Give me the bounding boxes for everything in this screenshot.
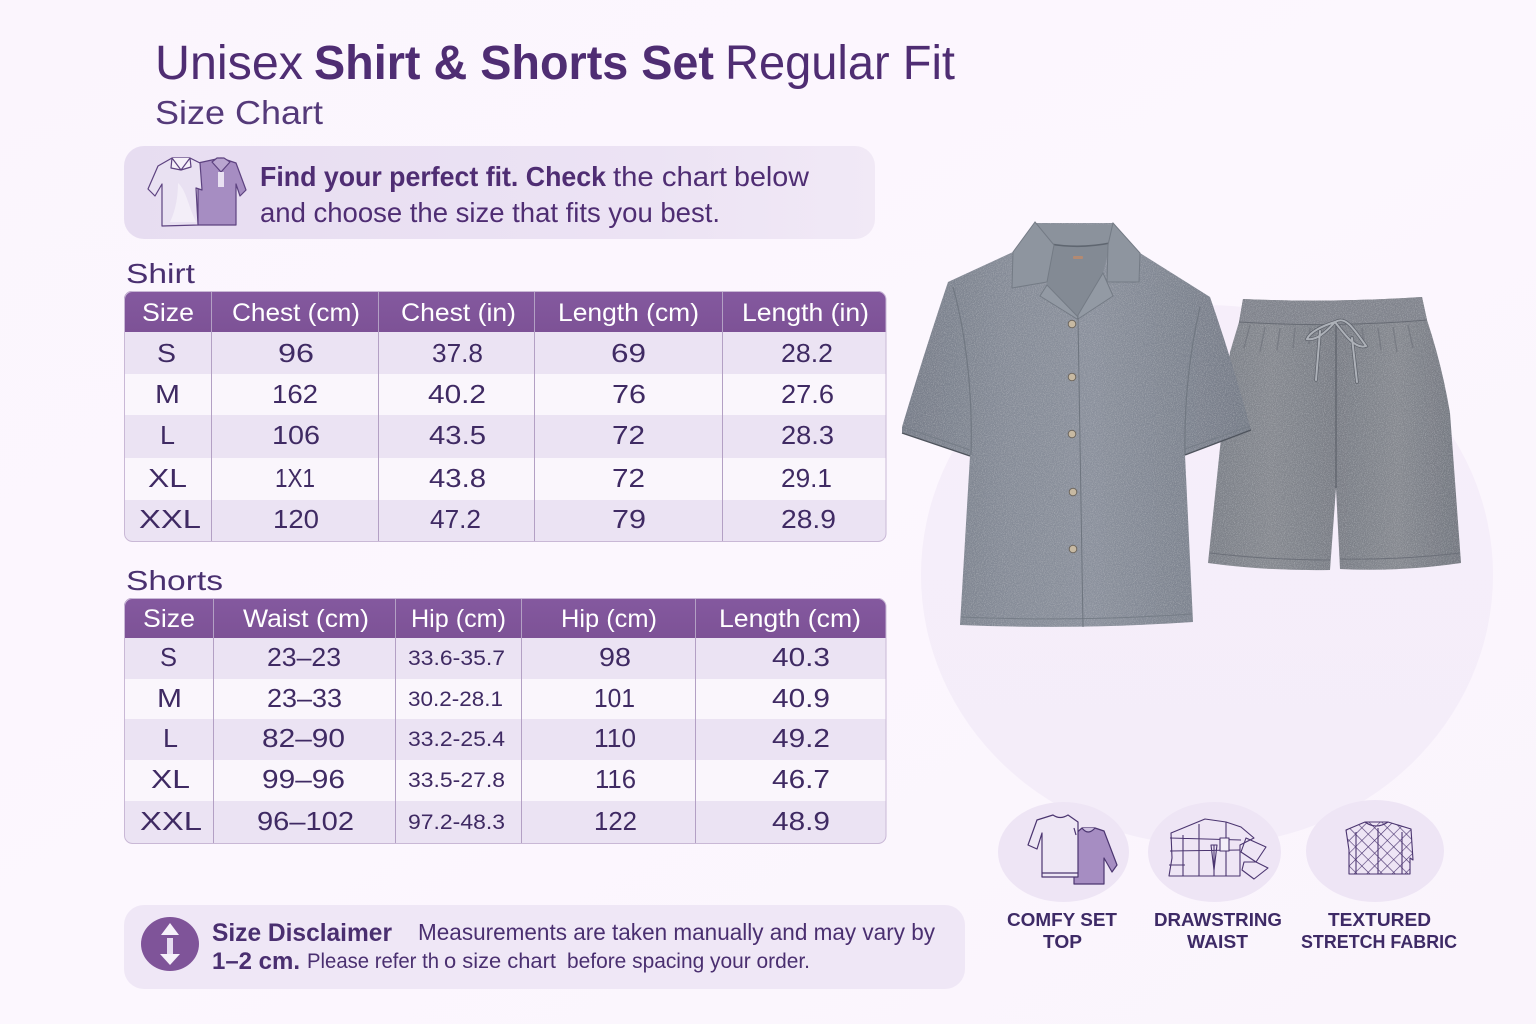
label: STRETCH FABRIC <box>1301 932 1457 952</box>
banner text: the chart <box>613 161 727 192</box>
panel: find your fit banner <box>124 146 875 239</box>
row M: M <box>157 683 182 713</box>
row M: 30.2-28.1 <box>408 688 503 711</box>
label <box>1301 910 1457 952</box>
row XL: 1X1 <box>275 463 315 493</box>
row XXL: XXL <box>139 504 201 534</box>
header row: Waist (cm) <box>243 605 369 633</box>
row XL: 72 <box>612 463 645 493</box>
buttons <box>1068 320 1077 553</box>
banner text: Find your perfect fit. Check <box>260 161 606 192</box>
header row <box>143 605 861 633</box>
row S: S <box>157 338 176 368</box>
disclaimer text: before spacing your order. <box>567 950 810 973</box>
header row <box>142 299 869 327</box>
banner text: below <box>734 161 810 192</box>
row XXL: 79 <box>612 504 646 534</box>
icon: quilted jacket <box>1346 822 1413 874</box>
row S: 40.3 <box>772 642 830 672</box>
row M <box>155 379 834 409</box>
row M: 162 <box>272 379 318 409</box>
header row: Chest (in) <box>401 299 516 327</box>
row M: 27.6 <box>781 379 834 409</box>
row XL <box>151 764 830 794</box>
row M: M <box>155 379 180 409</box>
table: shorts sizes <box>124 598 886 844</box>
disclaimer text: Measurements are taken manually and may vary by <box>418 919 935 945</box>
row M: 101 <box>594 683 635 713</box>
row XXL: 28.9 <box>781 504 836 534</box>
row XXL <box>139 504 836 534</box>
row L <box>160 420 834 450</box>
header row: Chest (cm) <box>232 299 360 327</box>
row XXL: 96–102 <box>257 806 354 836</box>
label: DRAWSTRING <box>1154 910 1282 930</box>
row XXL: 122 <box>594 806 637 836</box>
row M: 76 <box>612 379 646 409</box>
row XXL: 48.9 <box>772 806 830 836</box>
row S <box>157 338 833 368</box>
row S: S <box>160 642 177 672</box>
row S: 33.6-35.7 <box>408 647 505 670</box>
row XXL: XXL <box>140 806 202 836</box>
row L: 43.5 <box>429 420 486 450</box>
title: Shirt & Shorts Set <box>314 37 714 90</box>
disclaimer text: Size Disclaimer <box>212 919 392 947</box>
row XL: XL <box>148 463 187 493</box>
row L: 110 <box>594 723 636 753</box>
icon: two shirts <box>148 158 246 226</box>
panel: size disclaimer <box>124 905 965 989</box>
background circle behind garments <box>921 305 1493 845</box>
title <box>155 37 955 90</box>
table: shirt sizes <box>124 291 886 542</box>
row L: L <box>160 420 175 450</box>
row S: 98 <box>599 642 631 672</box>
disclaimer text: Please refer th <box>307 950 439 973</box>
row L: 49.2 <box>772 723 830 753</box>
row L: L <box>163 723 178 753</box>
row XXL: 47.2 <box>430 504 481 534</box>
row M: 40.9 <box>772 683 830 713</box>
feature: textured stretch fabric <box>1301 800 1457 952</box>
row S <box>160 642 830 672</box>
row XL <box>148 463 832 493</box>
header row: Length (cm) <box>558 299 699 327</box>
header row: Hip (cm) <box>411 605 506 633</box>
header row: Hip (cm) <box>561 605 657 633</box>
label: WAIST <box>1187 932 1248 952</box>
row L <box>163 723 830 753</box>
heading: shirt: Shirt <box>126 258 195 289</box>
row M: 40.2 <box>428 379 486 409</box>
row L: 106 <box>272 420 320 450</box>
disclaimer text <box>212 919 935 975</box>
row XL: 46.7 <box>772 764 830 794</box>
label: TOP <box>1043 932 1082 952</box>
row M <box>157 683 830 713</box>
disclaimer text: o size chart <box>444 950 556 973</box>
row L: 82–90 <box>262 723 345 753</box>
icon: jacket panels <box>1169 819 1268 879</box>
icon: tee and shirt <box>1028 815 1117 884</box>
subtitle: Size Chart <box>155 94 323 131</box>
title: Regular Fit <box>725 37 955 90</box>
header row: Size <box>142 299 194 327</box>
feature: drawstring waist <box>1148 802 1282 952</box>
header row: Length (cm) <box>719 605 861 633</box>
row XL: 99–96 <box>262 764 345 794</box>
row XXL: 97.2-48.3 <box>408 811 505 834</box>
row XL: 29.1 <box>781 463 832 493</box>
label: COMFY SET <box>1007 910 1117 930</box>
row L: 72 <box>612 420 645 450</box>
row S: 28.2 <box>781 338 833 368</box>
feature: comfy set top <box>998 802 1129 952</box>
label <box>1007 910 1117 952</box>
row S: 69 <box>611 338 646 368</box>
disclaimer text: 1–2 cm. <box>212 948 300 975</box>
header row: Length (in) <box>742 299 869 327</box>
row S: 37.8 <box>432 338 483 368</box>
row L: 33.2-25.4 <box>408 728 505 751</box>
row XL: 33.5-27.8 <box>408 769 505 792</box>
row M: 23–33 <box>267 683 342 713</box>
label <box>1154 910 1282 952</box>
row XL: 43.8 <box>429 463 486 493</box>
row XL: XL <box>151 764 190 794</box>
placket <box>1078 318 1083 627</box>
label: TEXTURED <box>1328 910 1431 930</box>
row L: 28.3 <box>781 420 834 450</box>
row S: 23–23 <box>267 642 341 672</box>
row XL: 116 <box>595 764 636 794</box>
product: shirt <box>902 222 1251 627</box>
banner text: and choose the size that fits you best. <box>260 197 720 228</box>
row XXL <box>140 806 830 836</box>
collar <box>1012 222 1140 319</box>
sleeve seams <box>953 287 1200 455</box>
header row: Size <box>143 605 195 633</box>
row XXL: 120 <box>273 504 319 534</box>
banner text <box>260 161 810 228</box>
drawstring <box>1307 320 1366 382</box>
row S: 96 <box>278 338 314 368</box>
title: Unisex <box>155 37 303 90</box>
product: shorts <box>1208 297 1461 570</box>
icon: up and down arrow <box>141 917 199 971</box>
heading: shorts: Shorts <box>126 565 223 596</box>
